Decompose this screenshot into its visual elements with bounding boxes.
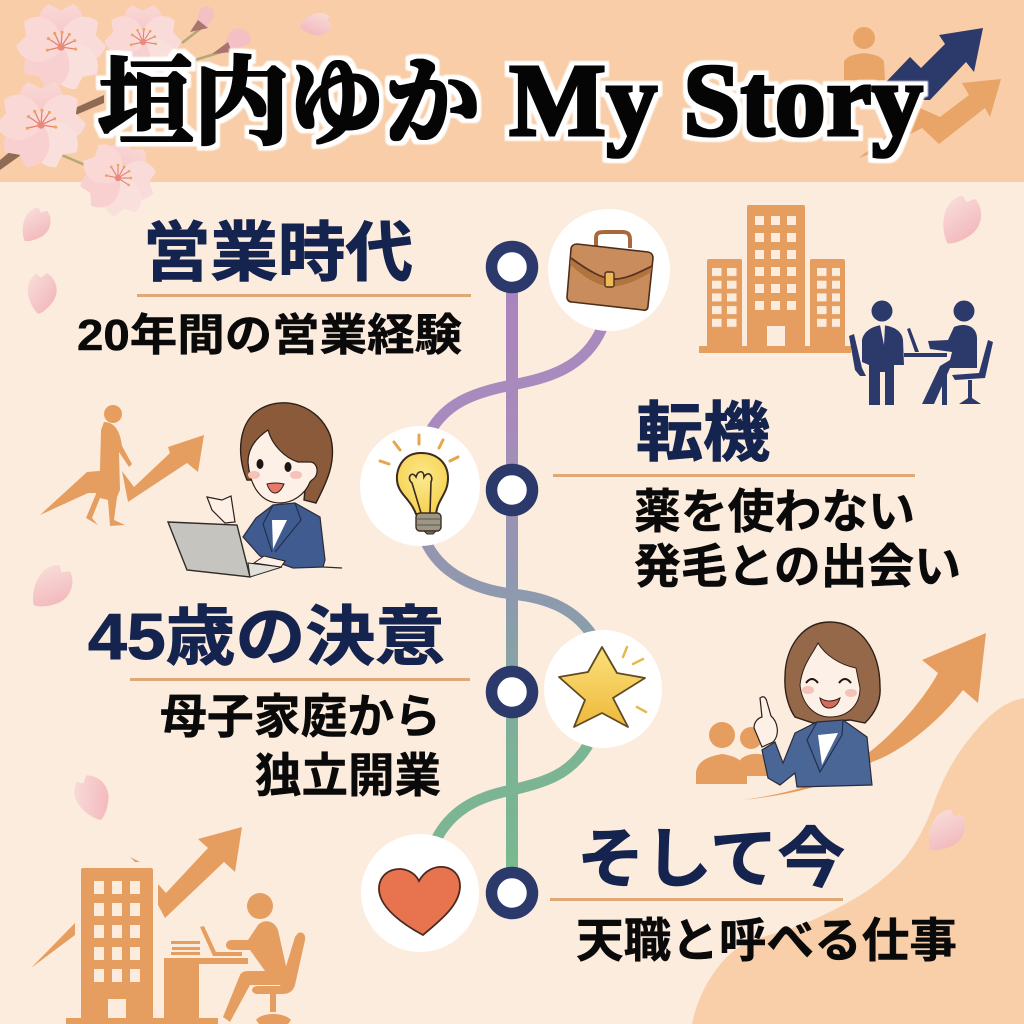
petal bbox=[28, 273, 57, 314]
heading: そして今 bbox=[577, 822, 845, 895]
timeline spine bbox=[506, 270, 518, 893]
icon: office buildings bbox=[699, 205, 851, 353]
title bbox=[98, 43, 923, 158]
section: 45歳の決意: 独立開業 bbox=[255, 749, 441, 802]
navy arrow bbox=[886, 28, 983, 100]
section: そして今 bbox=[550, 822, 957, 967]
face bbox=[800, 643, 860, 717]
jacket bbox=[243, 503, 325, 568]
sub text: 母子家庭から bbox=[160, 690, 441, 743]
petal bbox=[936, 191, 987, 251]
illustration: woman with laptop bbox=[168, 403, 342, 577]
laptop bbox=[168, 522, 250, 577]
face bbox=[248, 430, 317, 503]
illustration: smiling woman pointing bbox=[754, 622, 880, 787]
timeline connector curves bbox=[425, 328, 602, 840]
timeline node 4 bbox=[492, 872, 532, 914]
icon: business meeting bbox=[849, 300, 993, 405]
bud bbox=[190, 7, 214, 32]
sub text: 薬を使わない bbox=[634, 485, 915, 538]
hair bbox=[785, 622, 880, 723]
timeline node 3 bbox=[492, 672, 532, 712]
icon: worker at desk with building and arrow bbox=[31, 827, 305, 1024]
section: 45歳の決意 bbox=[88, 600, 470, 802]
timeline node 2 bbox=[492, 470, 532, 510]
petal bbox=[68, 770, 119, 826]
section: 営業時代 bbox=[77, 216, 471, 360]
bud bbox=[212, 28, 251, 54]
hair bbox=[241, 403, 332, 503]
person silhouette bbox=[844, 27, 885, 80]
bottom right blob bbox=[692, 698, 1024, 1024]
petal bbox=[298, 10, 334, 40]
title: 垣内ゆか bbox=[98, 50, 480, 157]
icon: header person and growth arrows bbox=[844, 27, 1001, 158]
icon: light bulb bbox=[360, 426, 480, 546]
illustration: cherry blossom branch bbox=[0, 4, 251, 233]
icon: heart bbox=[361, 834, 479, 952]
sub text: 天職と呼べる仕事 bbox=[576, 914, 957, 967]
heading: 転機 bbox=[636, 396, 770, 469]
petal bbox=[920, 804, 972, 860]
petal bbox=[24, 559, 80, 618]
title: My Story bbox=[509, 43, 923, 158]
raised hand bbox=[207, 496, 235, 523]
icon: star bbox=[544, 630, 662, 748]
petal bbox=[16, 204, 55, 248]
pointing hand bbox=[754, 697, 777, 747]
jacket bbox=[762, 720, 872, 787]
sub text: 20年間の営業経験 bbox=[77, 311, 462, 360]
icon: walking woman and arrow bbox=[40, 405, 204, 526]
section: 転機 bbox=[553, 396, 961, 593]
heading: 営業時代 bbox=[143, 216, 413, 289]
section: 転機: 発毛との出会い bbox=[634, 540, 961, 593]
icon: briefcase bbox=[548, 209, 670, 331]
timeline node 1 bbox=[492, 246, 532, 288]
icon: growth arrow with colleagues bbox=[696, 633, 986, 800]
header band bbox=[0, 0, 1024, 182]
orange arrow bbox=[859, 79, 1001, 158]
heading: 45歳の決意 bbox=[88, 600, 445, 673]
